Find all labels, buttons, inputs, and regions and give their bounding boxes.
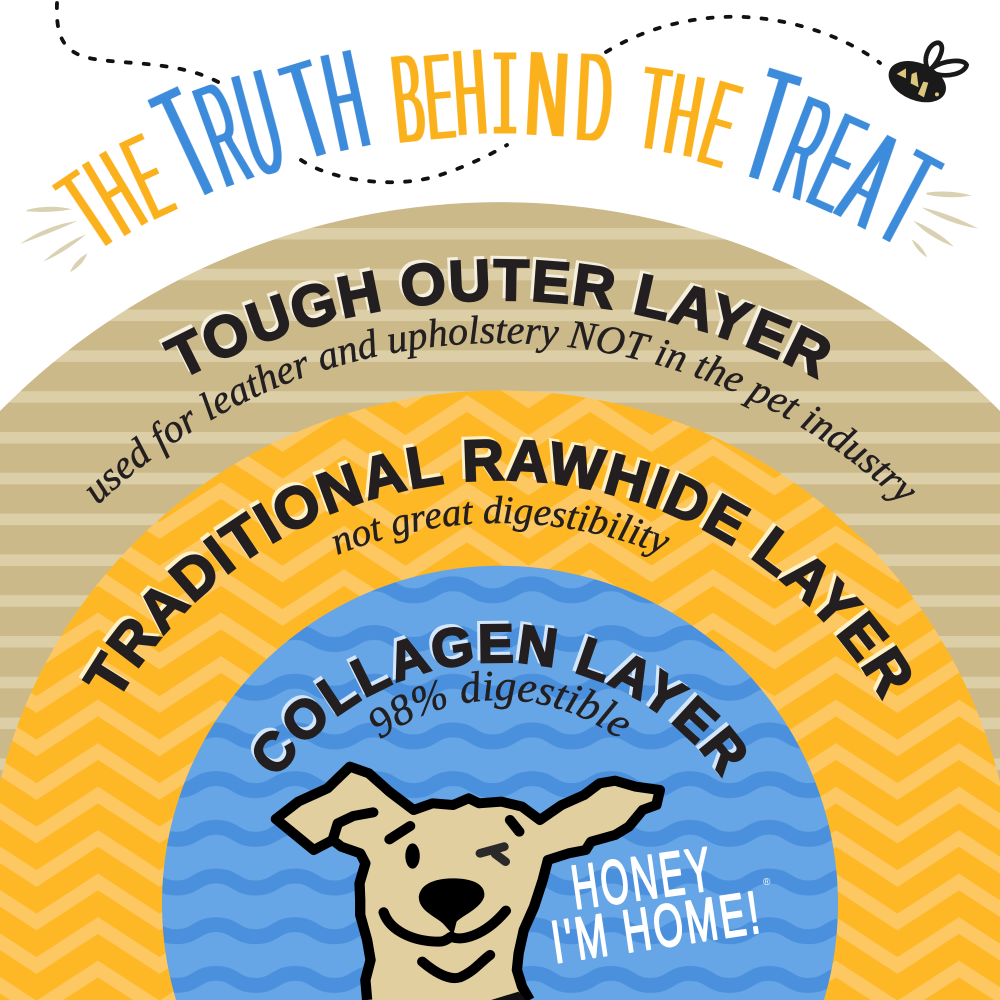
title: The Truth Behind the Treat: B: [386, 24, 431, 173]
logo: Honey I'm Home: ®: [763, 877, 771, 888]
heading: tough outer layer: TOUGH OUTER LAYER: [158, 256, 830, 380]
title: The Truth Behind the Treat: T: [857, 119, 960, 276]
logo: Honey I'm Home: I'M HOME!: [547, 879, 767, 976]
winking eye: [480, 847, 506, 862]
illustration: winking dog: [276, 767, 660, 1000]
dog head outline: [276, 767, 660, 1000]
heading: collagen layer: COLLAGEN LAYER: [250, 620, 746, 778]
ear crease: [333, 812, 373, 840]
title: The Truth Behind the Treat: E: [105, 107, 190, 246]
title: The Truth Behind the Treat: H: [312, 18, 380, 185]
panel: traditional rawhide layer: [0, 390, 1000, 1000]
title: The Truth Behind the Treat: D: [573, 23, 615, 171]
right brow: [510, 820, 519, 832]
panel: collagen layer: [162, 566, 838, 1000]
nose: [419, 878, 484, 935]
logo: Honey I'm Home: HONEY: [567, 833, 718, 922]
title: The Truth Behind the Treat: U: [221, 36, 298, 211]
title: The Truth Behind the Treat: [38, 18, 960, 276]
left eye: [405, 843, 420, 869]
left brow: [389, 826, 410, 839]
title: The Truth Behind the Treat: T: [269, 28, 346, 191]
heading: traditional rawhide layer: TRADITIONAL RAWHIDE LAYER: [78, 436, 912, 702]
title: The Truth Behind the Treat: E: [688, 52, 752, 196]
text: 98% digestible: 98% digestible: [370, 670, 629, 739]
title: The Truth Behind the Treat: E: [420, 25, 459, 168]
title: The Truth Behind the Treat: R: [758, 63, 849, 233]
title: The Truth Behind the Treat: I: [491, 29, 519, 174]
title: The Truth Behind the Treat: T: [133, 52, 239, 233]
title: The Truth Behind the Treat: T: [727, 33, 812, 219]
smile: [384, 911, 506, 942]
text: used for leather note: used for leather and upholstery NOT in the pet industry: [86, 315, 915, 503]
collar: [491, 992, 526, 1000]
title: The Truth Behind the Treat: N: [523, 26, 571, 165]
title: The Truth Behind the Treat: T: [38, 147, 136, 275]
title: The Truth Behind the Treat: A: [819, 100, 922, 258]
flourish: right burst: [912, 191, 978, 257]
title: The Truth Behind the Treat: H: [450, 21, 490, 164]
title: The Truth Behind the Treat: H: [66, 126, 164, 261]
title: The Truth Behind the Treat: T: [631, 40, 676, 178]
logo: Honey I'm Home: [547, 833, 771, 976]
flourish: left burst: [20, 207, 87, 272]
title: The Truth Behind the Treat: E: [790, 83, 884, 245]
icon: bee: [882, 43, 967, 110]
chin: [422, 955, 490, 978]
title: The Truth Behind the Treat: H: [657, 47, 711, 185]
text: not great digestibility: not great digestibility: [332, 496, 670, 557]
panel: tough outer layer: [0, 202, 1000, 1000]
title: The Truth Behind the Treat: R: [178, 48, 268, 221]
dotted bee flight path: [57, 3, 880, 182]
